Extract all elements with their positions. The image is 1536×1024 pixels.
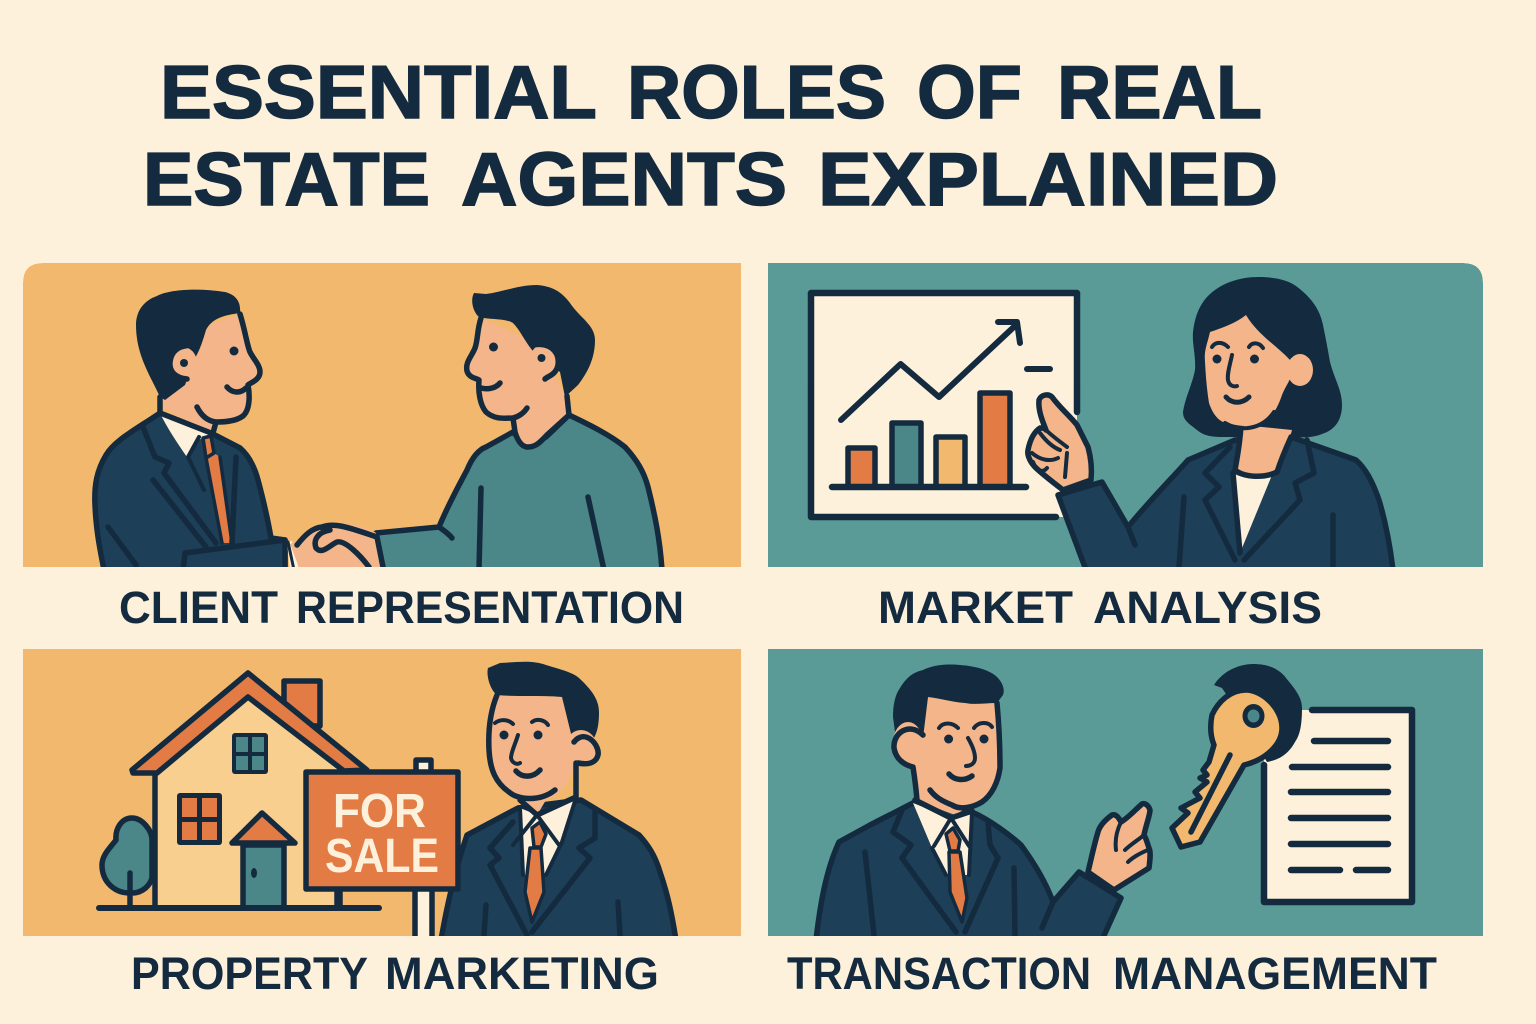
title: EXPLAINED [818, 137, 1278, 221]
agent in suit shaking hands [95, 290, 299, 570]
label: market analysis: MARKET [878, 582, 1073, 633]
panel: market analysis [768, 263, 1483, 570]
for sale sign: FOR [333, 785, 426, 838]
label: property marketing [131, 948, 659, 999]
title: AGENTS [461, 137, 787, 221]
house door [232, 813, 295, 908]
line trend arrow [841, 322, 1020, 420]
icon: tree [102, 818, 152, 907]
for sale sign [306, 760, 458, 940]
agent beside sign [441, 662, 676, 940]
title: OF [917, 50, 1022, 134]
house window [177, 793, 222, 845]
label: client representation [119, 582, 684, 633]
dash mark [1027, 366, 1050, 372]
bar chart [832, 393, 1026, 487]
title: ESTATE [143, 137, 430, 221]
label: transaction management [787, 948, 1437, 999]
icon: house [99, 673, 379, 908]
handshake [288, 523, 383, 570]
title: ESSENTIAL [160, 50, 597, 134]
agent pointing at chart [1028, 277, 1393, 570]
label: transaction management: MANAGEMENT [1113, 948, 1437, 999]
label: client representation: CLIENT [119, 582, 278, 633]
icon: key [1172, 664, 1302, 847]
agent with pointing hand [816, 665, 1150, 940]
label: property marketing: MARKETING [385, 948, 659, 999]
label: market analysis: ANALYSIS [1093, 582, 1322, 633]
pointing hand [1028, 395, 1091, 490]
label: market analysis [878, 582, 1322, 633]
pointing hand [1088, 804, 1150, 890]
panel: property marketing [23, 649, 741, 940]
title [143, 50, 1278, 221]
title: ROLES [627, 50, 886, 134]
label: property marketing: PROPERTY [131, 948, 368, 999]
panel: transaction management [768, 649, 1483, 940]
label: client representation: REPRESENTATION [296, 582, 684, 633]
for sale sign: SALE [325, 830, 439, 883]
house window [232, 733, 268, 774]
chart board [811, 293, 1077, 517]
client in sweater [376, 285, 662, 570]
panel: client representation [23, 263, 741, 570]
title: REAL [1057, 50, 1262, 134]
document [1264, 710, 1413, 902]
label: transaction management: TRANSACTION [787, 948, 1091, 999]
